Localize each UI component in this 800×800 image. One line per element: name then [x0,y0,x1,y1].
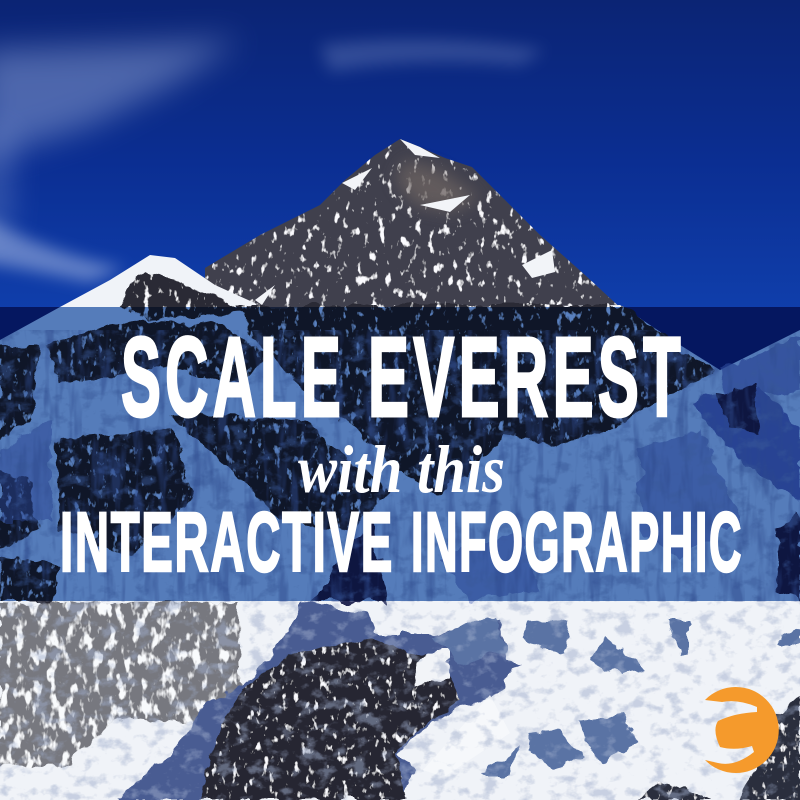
Everest summit [205,139,625,312]
blue ice blocks [429,617,800,777]
title: Scale Everest: SCALE [121,314,345,440]
title: Interactive Infographic: INTERACTIVE [60,495,394,589]
lower mountain range [0,255,800,800]
icon: orange logo [705,687,779,773]
sky background [0,0,800,367]
dark central massif [117,600,520,800]
rock faces in band [0,270,715,601]
clouds [0,40,545,282]
subtitle: with this: with this [298,431,505,507]
grey rock below band [0,602,240,767]
ice shadows in band [0,335,800,600]
translucent title band [0,307,800,601]
surface texture [0,330,800,800]
